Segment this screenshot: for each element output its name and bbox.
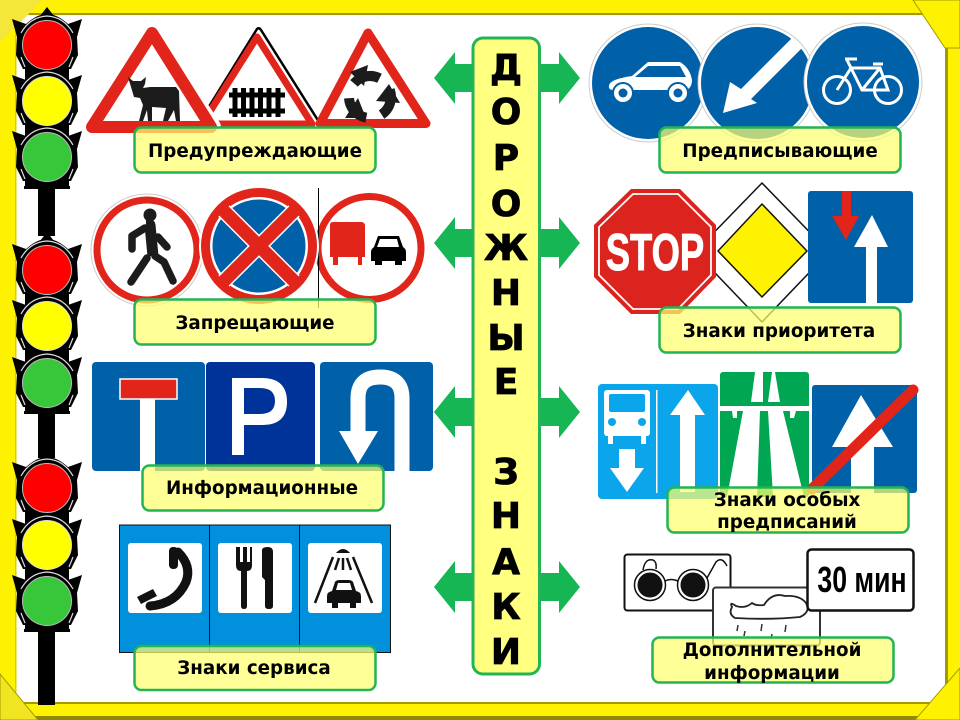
title: vertical: Ы [487, 318, 525, 359]
title: vertical: Н [491, 496, 521, 537]
sign group: warning [91, 28, 426, 128]
sign group: prohibitory [91, 186, 421, 308]
label: special regulations [668, 488, 908, 533]
icon: car wash [308, 543, 382, 613]
sign group: additional information [624, 550, 914, 646]
sign: roundabout triangle [320, 33, 426, 124]
sign: no stopping [199, 186, 319, 306]
traffic lights column [12, 7, 82, 705]
title: vertical: З [493, 452, 519, 493]
arrows [434, 52, 580, 613]
label: additional information: информации [704, 663, 840, 684]
sign: parking [206, 362, 315, 471]
labels [134, 128, 908, 690]
sign: no overtaking by trucks [318, 188, 421, 308]
sign: stop [594, 189, 716, 314]
icon: telephone [128, 543, 202, 613]
sign: cattle triangle [91, 32, 213, 127]
label: information [142, 466, 384, 510]
title: vertical: И [491, 632, 521, 673]
label: warning: Предупреждающие [148, 141, 362, 162]
sign: railway crossing triangle [197, 28, 320, 128]
sign: 30 min plate [808, 550, 914, 610]
sign: priority over oncoming [808, 191, 913, 303]
arrows row 4 [434, 561, 580, 613]
sign: cars only [589, 24, 707, 142]
title: vertical: О [491, 92, 521, 133]
sign group: information [92, 362, 433, 471]
label: additional information [652, 638, 894, 684]
label: prohibitory: Запрещающие [175, 313, 335, 334]
sign: priority road [695, 183, 829, 322]
sign: 30 min plate: 30 мин [817, 559, 907, 600]
label: prohibitory [134, 300, 376, 344]
title: vertical: Е [494, 362, 518, 403]
label: priority: Знаки приоритета [683, 321, 875, 342]
label: service [134, 646, 376, 690]
label: additional information: Дополнительной [683, 640, 861, 661]
sign group: priority [594, 183, 913, 322]
arrows row 2 [434, 217, 580, 269]
title: vertical [473, 38, 540, 674]
label: mandatory: Предписывающие [682, 141, 878, 162]
title: vertical: А [492, 542, 520, 583]
arrows row 1 [434, 52, 580, 104]
label: special regulations: предписаний [717, 512, 857, 533]
label: mandatory [660, 128, 900, 172]
title: vertical: Н [491, 273, 521, 314]
sign: dead end [92, 362, 205, 471]
sign group: service [120, 525, 390, 652]
sign group: special regulations [598, 372, 917, 499]
sign: no pedestrians [91, 194, 203, 306]
sign: motorway [720, 372, 809, 497]
icon: fork and knife [218, 543, 292, 613]
title: vertical: О [491, 184, 521, 225]
sign: stop: STOP [606, 222, 704, 282]
sign: bus lane [598, 384, 718, 499]
sign group: mandatory [589, 23, 922, 142]
title: vertical: К [491, 587, 521, 628]
label: special regulations: Знаки особых [714, 490, 860, 511]
sign: end of lane [812, 385, 917, 493]
title: vertical: Ж [484, 228, 528, 269]
sign: keep left [698, 24, 816, 142]
sign: cycle path [804, 23, 922, 141]
title: vertical: Д [490, 48, 522, 89]
sign: u-turn [320, 362, 433, 471]
label: warning [134, 128, 376, 172]
arrows row 3 [434, 386, 580, 438]
label: information: Информационные [166, 478, 358, 499]
title: vertical: Р [493, 138, 519, 179]
label: service: Знаки сервиса [177, 658, 331, 679]
label: priority [660, 308, 900, 352]
sign: rain plate [713, 588, 820, 646]
sign: blind pedestrians plate [624, 554, 730, 610]
